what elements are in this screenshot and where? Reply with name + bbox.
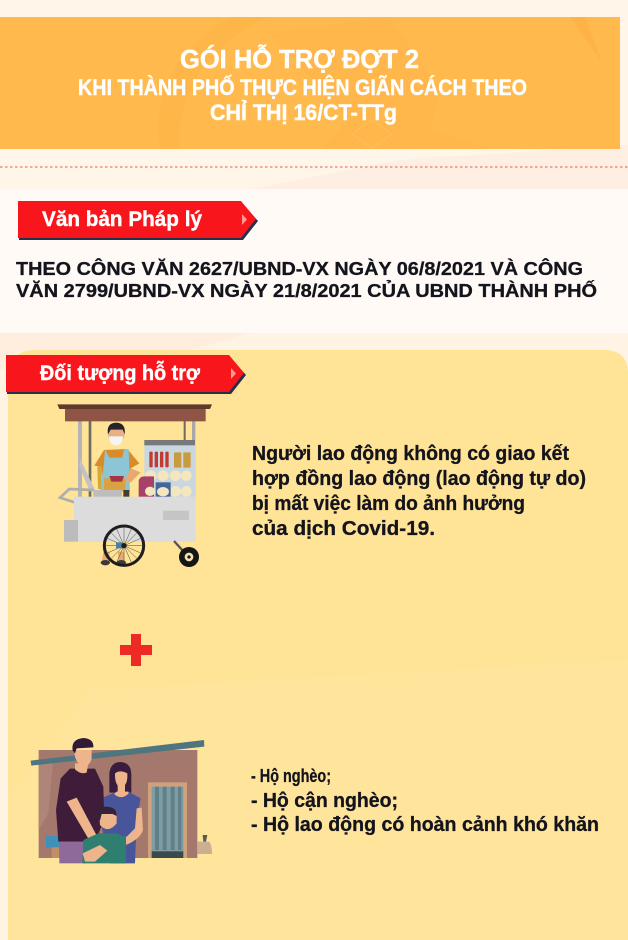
description: self-employed workers: Người lao động không có giao kết xyxy=(252,443,569,465)
label: legal documents xyxy=(18,201,258,240)
label: legal documents: Văn bản Pháp lý xyxy=(42,208,202,231)
title: GÓI HỖ TRỢ ĐỢT 2 xyxy=(180,44,419,74)
legal text: VĂN 2799/UBND-VX NGÀY 21/8/2021 CỦA UBND THÀNH PHỐ xyxy=(16,280,597,301)
list: priority households: - Hộ cận nghèo; xyxy=(251,790,398,812)
legal text xyxy=(16,258,597,301)
label: beneficiaries xyxy=(6,355,246,394)
description: self-employed workers: bị mất việc làm do ảnh hưởng xyxy=(252,493,525,515)
header banner xyxy=(0,17,620,149)
description: self-employed workers: hợp đồng lao động (lao động tự do) xyxy=(252,468,586,490)
title: KHI THÀNH PHỐ THỰC HIỆN GIÃN CÁCH THEO xyxy=(78,74,527,100)
icon: plus sign xyxy=(120,634,152,666)
title: CHỈ THỊ 16/CT-TTg xyxy=(210,100,397,125)
legal text: THEO CÔNG VĂN 2627/UBND-VX NGÀY 06/8/2021 VÀ CÔNG xyxy=(16,258,583,279)
title xyxy=(78,44,527,125)
list: priority households: - Hộ lao động có hoàn cảnh khó khăn xyxy=(251,814,599,836)
list: priority households xyxy=(251,766,599,836)
panel: beneficiaries xyxy=(6,350,628,940)
description: self-employed workers xyxy=(252,443,586,540)
label: beneficiaries: Đối tượng hỗ trợ xyxy=(40,361,200,385)
description: self-employed workers: của dịch Covid-19. xyxy=(252,518,435,540)
icon: family in front of house xyxy=(31,738,212,863)
icon: street food cart vendor xyxy=(57,404,212,567)
list: priority households: - Hộ nghèo; xyxy=(251,766,331,786)
